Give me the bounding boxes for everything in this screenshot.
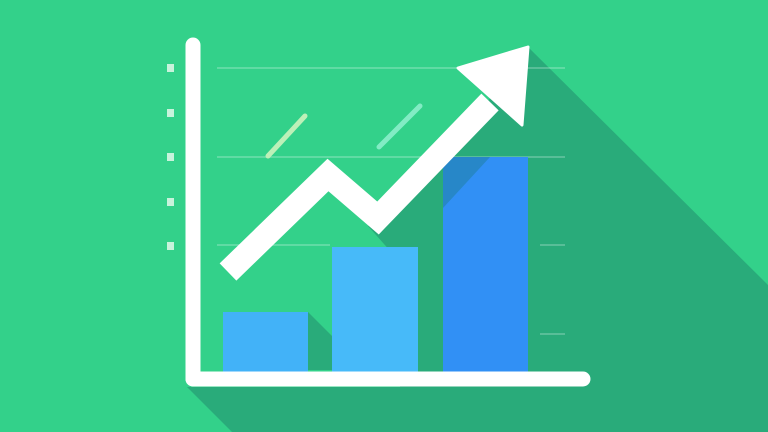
gridlines: [217, 68, 565, 334]
axes: [193, 45, 583, 379]
bar 3: [443, 157, 528, 372]
trend arrow: [228, 47, 528, 272]
long shadow: [187, 47, 768, 432]
bar 2: [332, 247, 418, 372]
y-axis tick marks: [167, 64, 174, 250]
bar 1: [223, 312, 308, 372]
decorative dashes: [268, 106, 420, 156]
